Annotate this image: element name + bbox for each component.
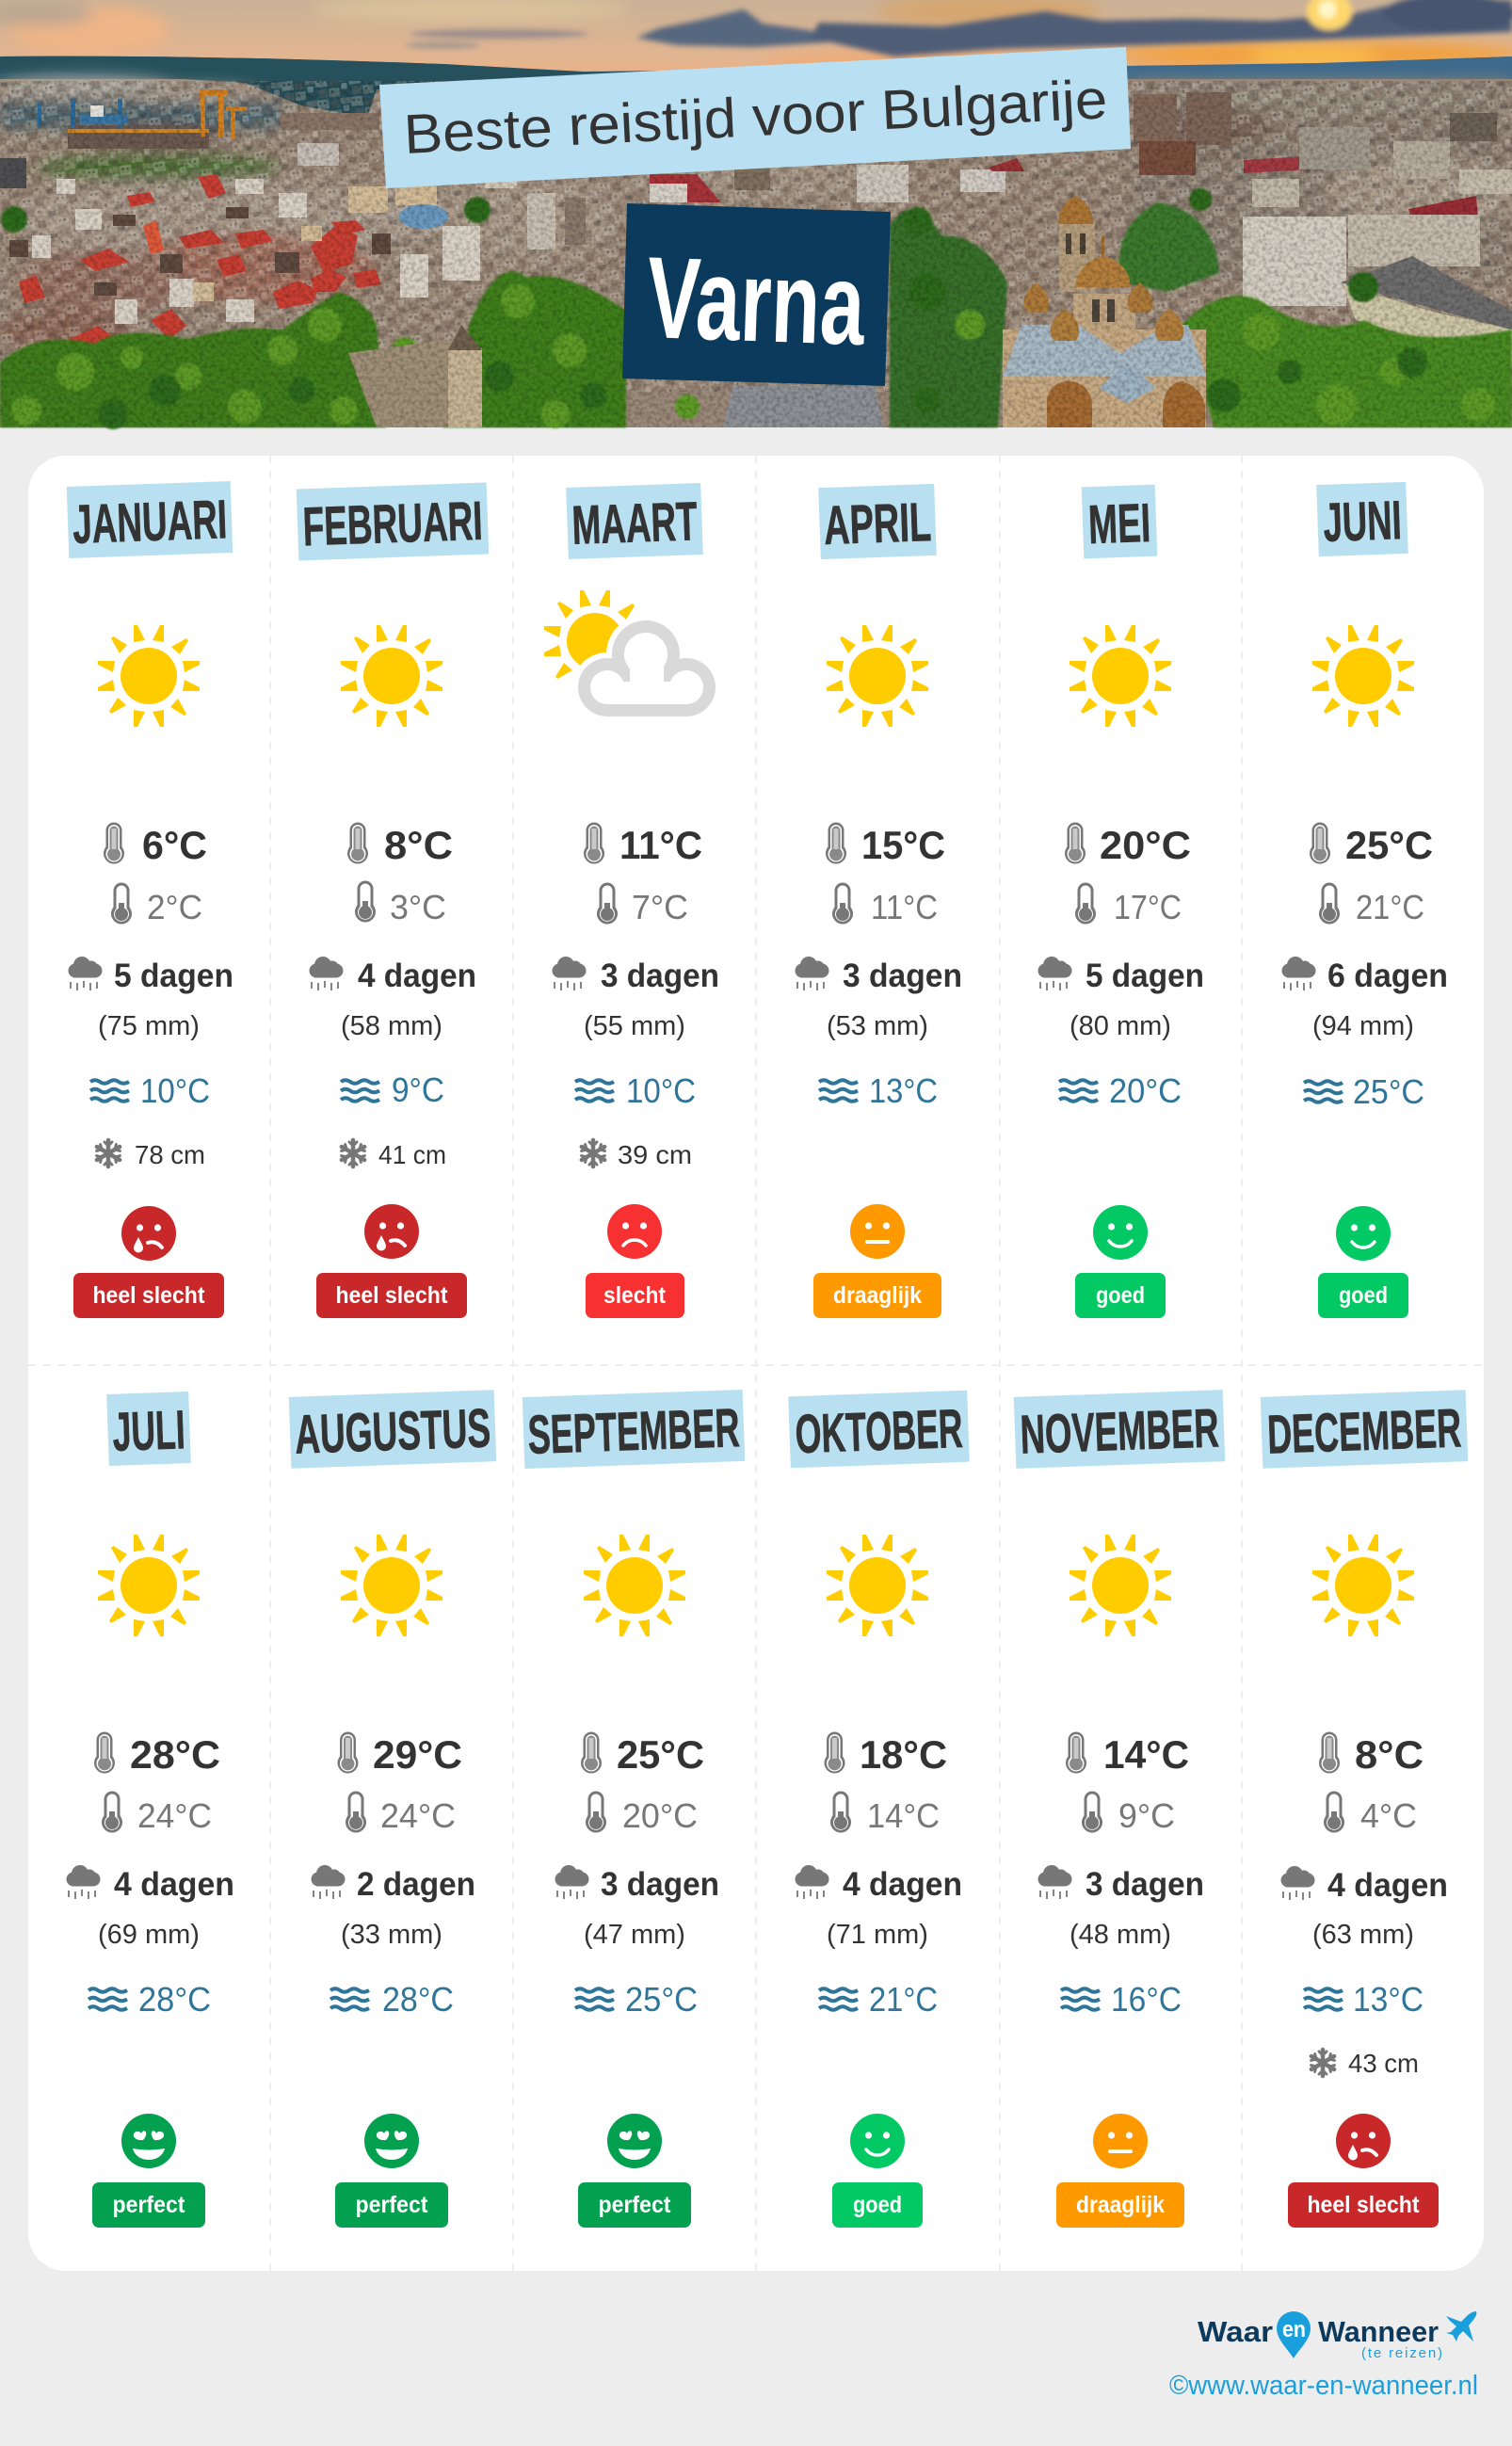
low temperature [597,883,688,926]
high temperature [1310,823,1433,867]
snow depth: 78 cm [135,1140,205,1169]
logo: Waar en Wanneer: en [1282,2317,1306,2342]
month heading: AUGUSTUS [294,1397,491,1466]
logo: Waar en Wanneer: Waar [1198,2315,1273,2348]
high temperature [1319,1732,1424,1777]
month heading: OKTOBER [795,1398,964,1465]
logo: Waar en Wanneer [1198,2311,1476,2361]
rain days: 5 dagen [114,957,233,994]
rating face [1336,2114,1391,2168]
month panel: februari [297,482,489,1318]
rating badge [1075,1273,1166,1318]
high temperature: 15°C [861,823,945,867]
high temperature: 6°C [142,823,207,867]
water temperature [341,1070,444,1109]
low temperature: 4°C [1360,1796,1417,1835]
month panel: oktober [788,1391,970,2228]
month panel: november [1014,1390,1225,2228]
high temperature [347,823,453,867]
low temperature [102,1791,212,1835]
icon: sun [827,1535,928,1636]
rain days: 4 dagen [358,957,476,994]
high temperature [94,1732,220,1777]
logo: Waar en Wanneer: Wanneer [1318,2315,1439,2348]
low temperature [586,1791,698,1835]
icon: sun [98,1535,200,1636]
rating badge: heel slecht [335,1282,448,1309]
rain days [311,1865,475,1903]
high temperature: 11°C [619,823,702,867]
low temperature [1319,883,1424,926]
header photo: Varna skyline [0,0,1512,429]
month heading: SEPTEMBER [527,1397,741,1466]
rating badge [578,2182,691,2228]
rating badge: perfect [356,2192,428,2218]
water temperature: 25°C [625,1980,698,2019]
high temperature [584,823,702,867]
low temperature: 14°C [867,1796,940,1835]
water temperature [1304,1980,1424,2019]
rain days [795,1865,962,1903]
water temperature [90,1071,210,1110]
rainfall: (71 mm) [827,1920,928,1950]
rain days: 3 dagen [1086,1866,1204,1903]
high temperature: 18°C [860,1732,947,1777]
water temperature [819,1071,938,1110]
month heading: NOVEMBER [1020,1397,1220,1466]
high temperature: 25°C [617,1732,704,1777]
rainfall: (47 mm) [584,1920,685,1950]
icon: sun [1070,1535,1171,1636]
snow depth [580,1140,692,1169]
snow depth: 39 cm [618,1140,692,1169]
high temperature [104,823,207,867]
water temperature: 13°C [869,1071,938,1110]
low temperature [1075,883,1182,926]
water temperature: 21°C [869,1980,938,2019]
low temperature: 11°C [871,888,938,926]
rating face [121,1206,176,1261]
month heading [297,482,489,561]
rain days: 3 dagen [601,957,719,994]
water temperature: 9°C [392,1070,444,1109]
snow depth: 43 cm [1348,2049,1419,2078]
rain days [68,957,233,994]
rating badge: goed [1339,1282,1388,1309]
high temperature: 8°C [384,823,453,867]
rainfall: (80 mm) [1070,1011,1171,1041]
rating face [607,1204,662,1259]
low temperature: 24°C [380,1796,456,1835]
month heading [523,1390,745,1469]
month panel: september [523,1390,745,2228]
rain days [552,957,719,994]
rating face [121,2114,176,2168]
low temperature [1324,1791,1417,1835]
rainfall: (69 mm) [98,1920,200,1950]
high temperature: 25°C [1345,823,1433,867]
rain days: 3 dagen [843,957,962,994]
month heading [818,484,937,559]
rating badge: heel slecht [1307,2192,1420,2218]
month heading: MEI [1087,492,1151,555]
title banner: Beste reistijd voor Bulgarije [379,47,1131,188]
rainfall: (55 mm) [584,1011,685,1041]
rain days [795,957,962,994]
month heading [289,1390,496,1469]
water temperature [1304,1072,1424,1111]
high temperature [1066,1732,1189,1777]
month heading [1014,1390,1225,1469]
snow depth [95,1140,205,1169]
month heading: JANUARI [72,489,228,555]
month panel: augustus [289,1390,496,2228]
icon: sun [584,1535,685,1636]
rain days [309,957,476,994]
water temperature: 28°C [138,1980,211,2019]
water temperature: 13°C [1353,1980,1424,2019]
rating badge [73,1273,224,1318]
rating badge [832,2182,923,2228]
rainfall: (58 mm) [341,1011,442,1041]
rating badge: draaglijk [1076,2192,1165,2218]
low temperature: 3°C [390,888,446,926]
rainfall: (63 mm) [1312,1920,1414,1950]
low temperature: 17°C [1114,888,1182,926]
icon: sun behind cloud [544,590,721,722]
month heading [788,1391,970,1468]
panel: climate card [28,456,1484,2271]
low temperature: 2°C [147,888,202,926]
month heading: JULI [111,1399,186,1463]
low temperature: 9°C [1118,1796,1175,1835]
rain days [1037,1865,1204,1903]
icon: airplane [1446,2311,1476,2341]
rating badge [335,2182,448,2228]
month heading [566,483,703,559]
icon: sun [1312,625,1414,727]
low temperature: 20°C [622,1796,698,1835]
water temperature: 16°C [1111,1980,1182,2019]
rating badge [1318,1273,1408,1318]
water temperature [1061,1980,1182,2019]
icon: sun [1070,625,1171,727]
water temperature [819,1980,938,2019]
water temperature [88,1980,211,2019]
rating badge [92,2182,205,2228]
high temperature [826,823,945,867]
month panel: april [795,484,962,1318]
high temperature: 20°C [1100,823,1191,867]
month heading [1316,482,1408,556]
rainfall: (94 mm) [1312,1011,1414,1041]
title banner: Beste reistijd voor Bulgarije: Beste reistijd voor Bulgarije [402,68,1109,166]
rating face [364,1204,419,1259]
rating face [1093,1205,1148,1260]
rating face [607,2114,662,2168]
high temperature [581,1732,704,1777]
rating face [1336,1206,1391,1261]
low temperature [830,1791,940,1835]
icon: sun [341,1535,442,1636]
logo: Waar en Wanneer: (te reizen) [1361,2345,1442,2361]
icon: sun [98,625,200,727]
website credit: ©www.waar-en-wanneer.nl [1169,2371,1478,2401]
rain days: 6 dagen [1327,957,1448,994]
water temperature [1059,1071,1182,1110]
rainfall: (48 mm) [1070,1920,1171,1950]
month heading: MAART [571,491,699,556]
rating face [850,1204,905,1259]
rain days: 5 dagen [1086,957,1204,994]
month heading: JUNI [1322,490,1403,554]
water temperature [330,1980,454,2019]
high temperature [1065,823,1191,867]
rating badge [1288,2182,1439,2228]
rain days [1282,957,1448,994]
rating badge: perfect [599,2192,671,2218]
high temperature: 28°C [130,1732,220,1777]
rain days [555,1865,719,1903]
rain days: 2 dagen [357,1866,475,1903]
rainfall: (75 mm) [98,1011,200,1041]
rainfall: (33 mm) [341,1920,442,1950]
rainfall: (53 mm) [827,1011,928,1041]
rating badge: perfect [113,2192,185,2218]
month heading: FEBRUARI [302,491,484,557]
rating badge [586,1273,684,1318]
month panel: januari [67,481,233,1318]
rain days: 4 dagen [1327,1867,1448,1904]
high temperature: 29°C [373,1732,462,1777]
low temperature [355,881,446,926]
water temperature: 10°C [140,1071,210,1110]
city banner: Varna: Varna [645,233,868,370]
icon: sun [827,625,928,727]
low temperature [346,1791,456,1835]
rating badge: goed [853,2192,902,2218]
rain days: 3 dagen [601,1866,719,1903]
rain days [1037,957,1204,994]
rating badge [316,1273,467,1318]
rating badge [813,1273,941,1318]
low temperature: 7°C [632,888,688,926]
high temperature: 14°C [1103,1732,1189,1777]
water temperature: 28°C [382,1980,454,2019]
low temperature: 24°C [137,1796,212,1835]
month heading [67,481,233,558]
snow depth [340,1140,446,1169]
rating badge [1056,2182,1184,2228]
rating badge: draaglijk [833,1282,922,1309]
month panel: juli [66,1392,234,2228]
month heading: APRIL [823,491,932,556]
month panel: juni [1282,482,1448,1318]
icon: map pin [1277,2311,1311,2358]
low temperature [1082,1791,1175,1835]
rain days: 4 dagen [114,1866,234,1903]
city banner: Varna [622,203,891,386]
high temperature: 8°C [1355,1732,1424,1777]
month panel: december [1261,1390,1468,2228]
water temperature: 25°C [1353,1072,1424,1111]
month panel: maart [544,483,721,1318]
water temperature [575,1071,696,1110]
month panel: mei [1037,485,1204,1318]
rating badge: goed [1096,1282,1145,1309]
snow depth: 41 cm [378,1140,446,1169]
water temperature: 10°C [626,1071,696,1110]
icon: sun [1312,1535,1414,1636]
low temperature [832,883,938,926]
water temperature: 20°C [1109,1071,1182,1110]
rating badge: slecht [603,1282,667,1309]
month heading [1082,485,1157,558]
rating face [850,2114,905,2168]
low temperature [111,883,202,926]
icon: sun [341,625,442,727]
snow depth [1310,2049,1419,2078]
rating face [1093,2114,1148,2168]
rain days [66,1865,234,1903]
rain days [1280,1866,1448,1904]
rating face [364,2114,419,2168]
month heading [106,1392,191,1466]
rating badge: heel slecht [92,1282,205,1309]
low temperature: 21°C [1356,888,1424,926]
water temperature [575,1980,698,2019]
rain days: 4 dagen [843,1866,962,1903]
